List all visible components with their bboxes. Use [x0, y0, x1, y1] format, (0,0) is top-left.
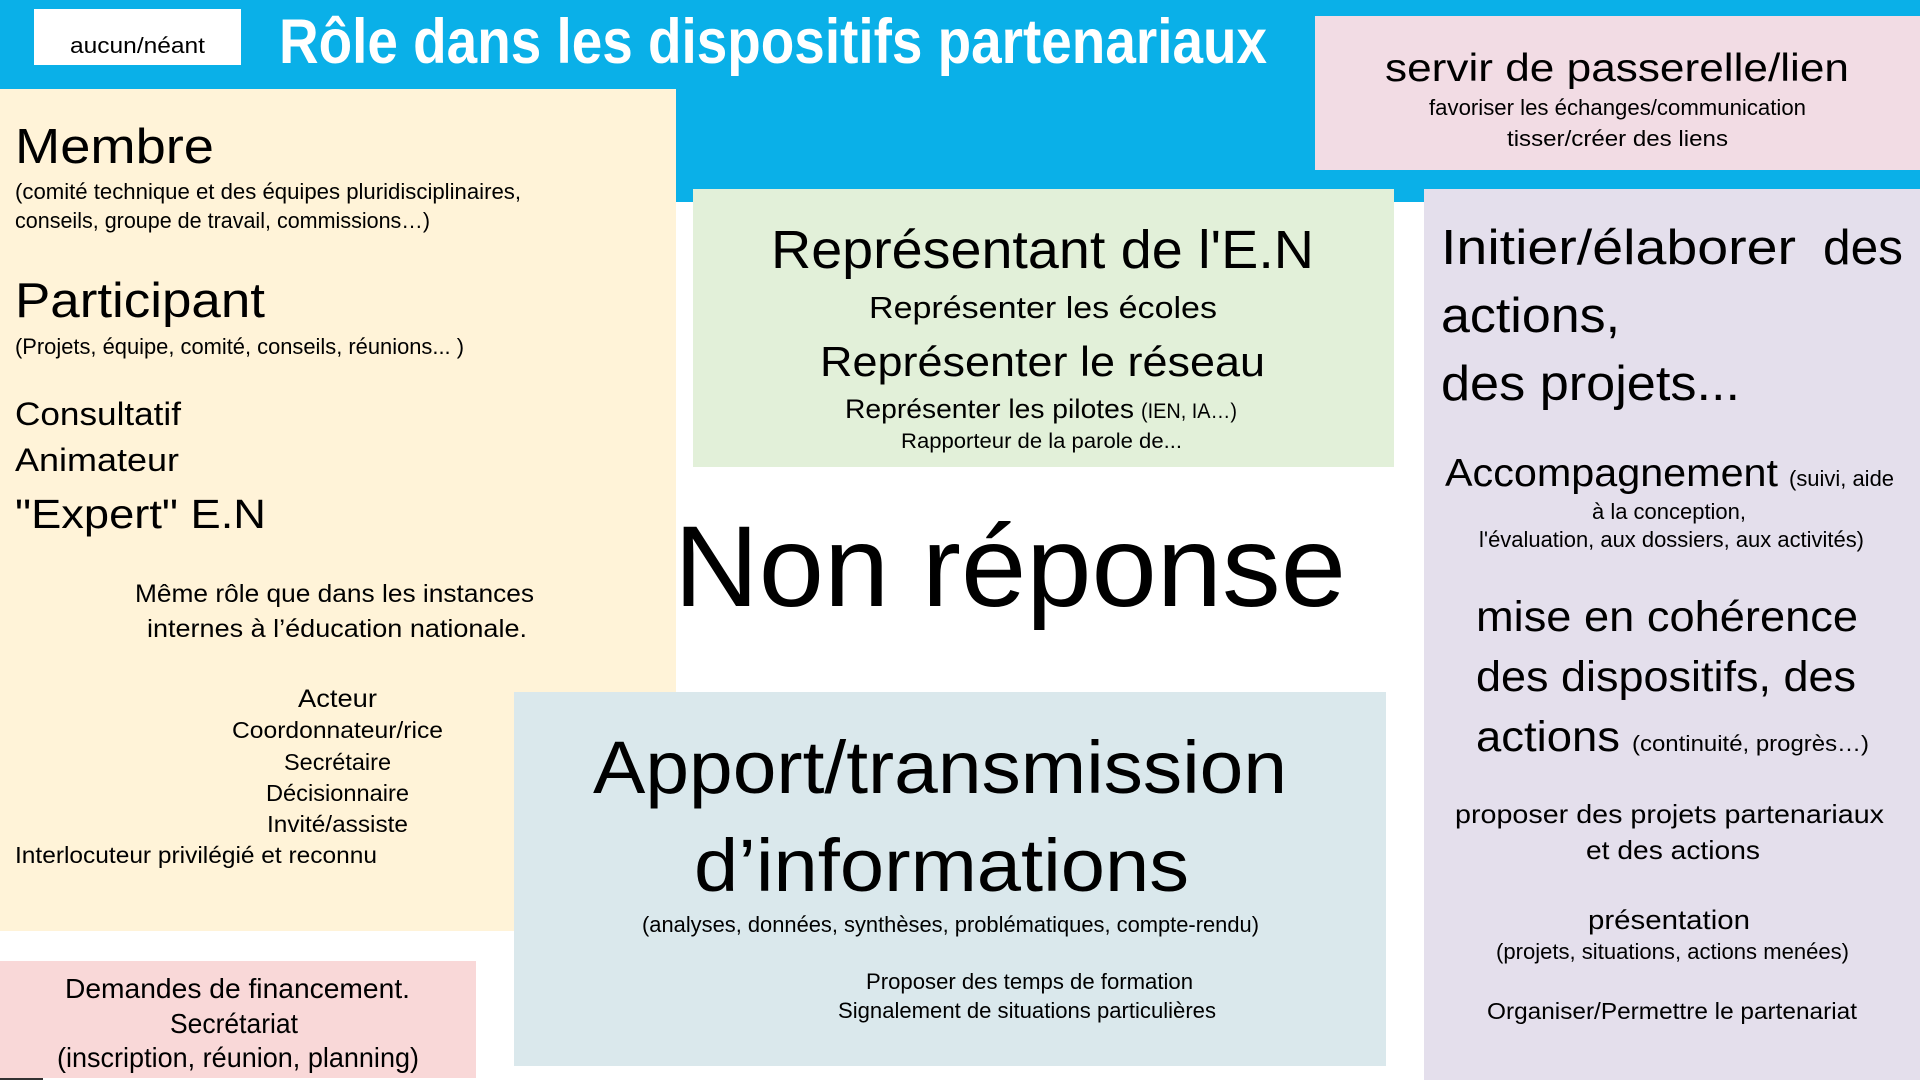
text: analyses, données: (analyses, données, synthèses, problématiques, compte-rendu) [642, 912, 1259, 937]
heading: Initier/élaborer: Initier/élaborer [1441, 221, 1796, 275]
heading: Apport/transmission d'informations: Apport/transmission [593, 726, 1287, 809]
text: Accompagnement: Accompagnement [1445, 452, 1778, 495]
text: formation et signalement: Signalement de situations particulières [838, 998, 1216, 1023]
text: Expert E.N: "Expert" E.N [15, 491, 266, 537]
text: précisions membre [15, 179, 521, 233]
text: formation et signalement: Proposer des temps de formation [866, 969, 1193, 994]
heading: Apport/transmission d'informations: d’informations [694, 824, 1189, 907]
text: Accompagnement [1445, 452, 1894, 552]
text: liste des rôles: Secrétaire [284, 749, 391, 775]
title: Rôle dans les dispositifs partenariaux [279, 7, 1267, 77]
panel: apport/transmission d'informations [514, 692, 1386, 1066]
heading: Initier/élaborer: des [1823, 221, 1903, 275]
text: liste des rôles: Coordonnateur/rice [232, 717, 443, 743]
text: échanges et liens: tisser/créer des liens [1507, 126, 1728, 151]
text: Représenter les pilotes: (IEN, IA…) [1141, 400, 1237, 423]
text: Représenter les écoles: Représenter les écoles [869, 290, 1217, 325]
text: mise en cohérence: des dispositifs, des [1476, 653, 1856, 701]
heading: Initier/élaborer [1441, 221, 1903, 411]
text: précisions membre: (comité technique et des équipes pluridisciplinaires, [15, 179, 521, 204]
panel: financement et secrétariat [0, 961, 476, 1078]
heading: servir de passerelle/lien: servir de passerelle/lien [1385, 47, 1849, 90]
text: proposer des projets: et des actions [1586, 835, 1760, 865]
text: échanges et liens: favoriser les échanges/communication [1429, 95, 1806, 120]
heading: Participant: Participant [15, 274, 265, 328]
text: Rapporteur: Rapporteur de la parole de... [901, 430, 1182, 453]
text: formation et signalement [838, 969, 1216, 1023]
legend box: aucun/néant [34, 9, 241, 65]
text: liste des rôles [15, 685, 443, 868]
legend box: aucun/néant: aucun/néant [70, 33, 205, 58]
panel: représentant de l'E.N [693, 189, 1394, 467]
text: Consultatif, Animateur [15, 396, 181, 478]
text: proposer des projets [1455, 799, 1884, 865]
heading: Initier/élaborer: des projets... [1441, 357, 1740, 411]
text: liste des rôles: Interlocuteur privilégié et reconnu [15, 842, 377, 868]
heading: Initier/élaborer: actions, [1441, 289, 1620, 343]
text: Organiser/Permettre: Organiser/Permettre le partenariat [1487, 998, 1858, 1024]
text: Demandes de financement: Demandes de financement. [65, 973, 410, 1004]
text: même rôle [135, 580, 534, 643]
text: mise en cohérence: actions [1476, 713, 1620, 761]
text: même rôle: Même rôle que dans les instances [135, 580, 534, 608]
text: même rôle: internes à l’éducation nationale. [147, 615, 527, 643]
heading: Apport/transmission d'informations [593, 726, 1287, 907]
text: mise en cohérence [1476, 593, 1869, 761]
text: mise en cohérence: (continuité, progrès…) [1632, 731, 1869, 756]
text: Consultatif, Animateur: Consultatif [15, 396, 181, 432]
text: présentation: présentation [1588, 905, 1750, 935]
text: liste des rôles: Décisionnaire [266, 780, 409, 806]
text: Accompagnement: à la conception, [1592, 499, 1746, 524]
text: liste des rôles: Invité/assiste [267, 811, 408, 837]
panel: initier, accompagner, organiser [1424, 189, 1920, 1080]
text: inscription, réunion, planning: (inscription, réunion, planning) [57, 1042, 419, 1073]
text: Secrétariat: Secrétariat [170, 1008, 298, 1039]
text: présentation: (projets, situations, actions menées) [1496, 939, 1849, 964]
text: liste des rôles: Acteur [298, 685, 377, 713]
text: Accompagnement: (suivi, aide [1789, 466, 1894, 491]
heading: Représentant de l'E.N: Représentant de l'E.N [771, 220, 1314, 280]
panel: passerelle/lien [1315, 16, 1920, 170]
heading: Représenter le réseau: Représenter le réseau [820, 338, 1265, 385]
central label: Non réponse: Non réponse [674, 503, 1346, 631]
panel: membre et participant [0, 89, 676, 931]
text: Accompagnement: l'évaluation, aux dossiers, aux activités) [1479, 527, 1864, 552]
text: proposer des projets: proposer des projets partenariaux [1455, 799, 1884, 829]
text: précisions participant: (Projets, équipe, comité, conseils, réunions... ) [15, 334, 464, 359]
heading: Membre: Membre [15, 120, 214, 174]
text: précisions membre: conseils, groupe de travail, commissions…) [15, 208, 430, 233]
text: présentation [1496, 905, 1849, 964]
text: Représenter les pilotes: Représenter les pilotes [845, 394, 1134, 424]
text: échanges et liens [1429, 95, 1806, 151]
header band [0, 0, 1920, 202]
text: Consultatif, Animateur: Animateur [15, 442, 179, 478]
text: mise en cohérence: mise en cohérence [1476, 593, 1858, 641]
